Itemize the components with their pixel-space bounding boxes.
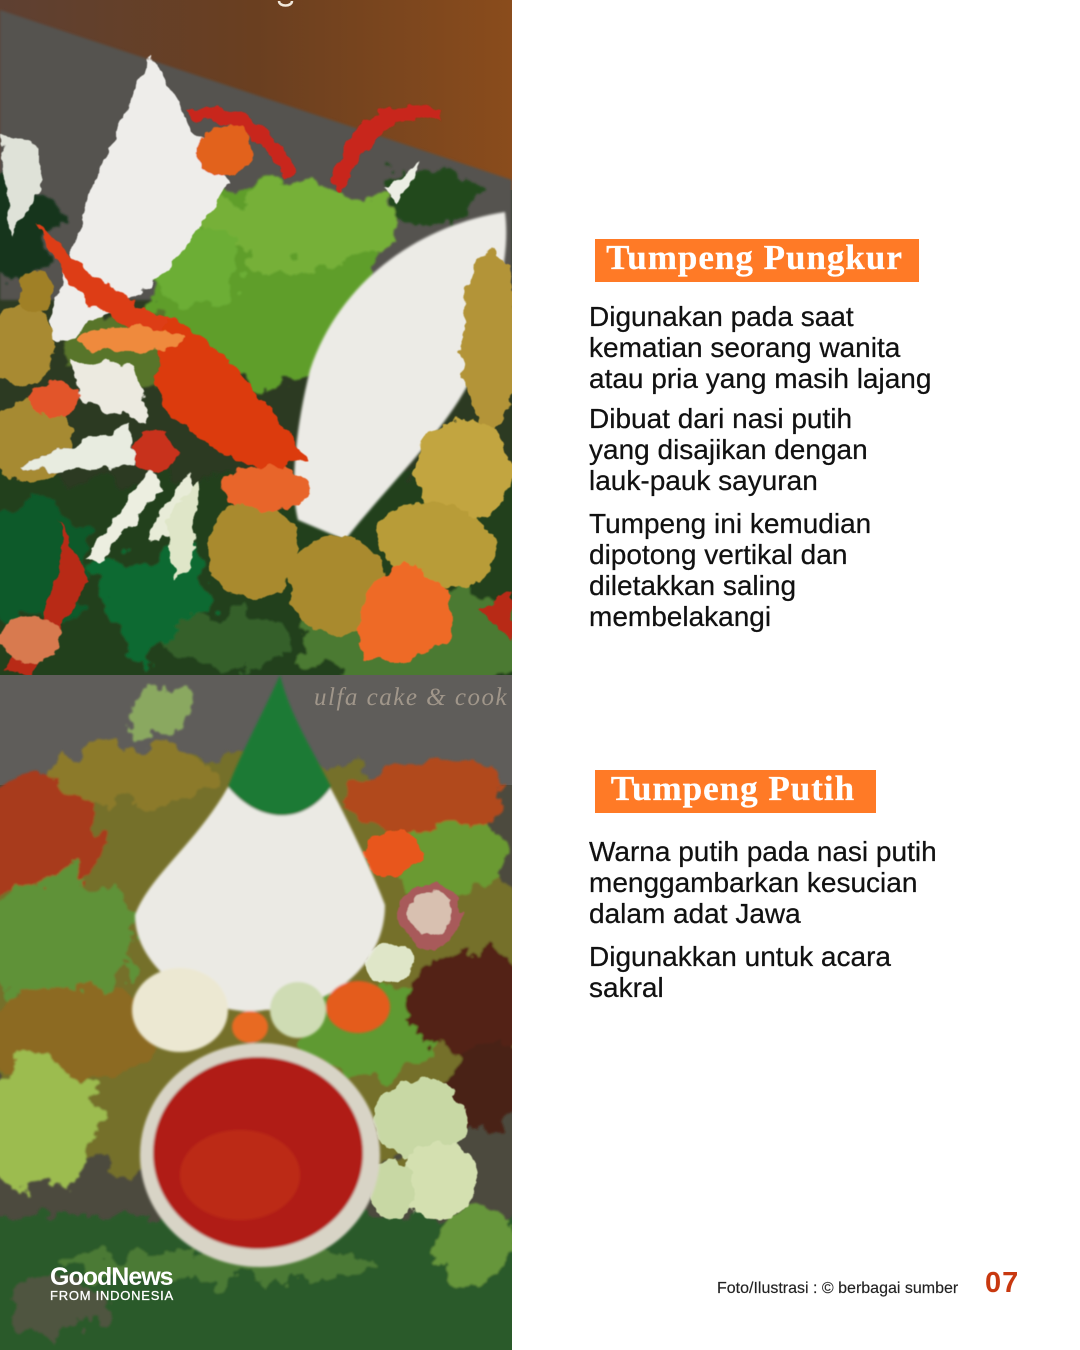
text: pungkur paragraph 1: Digunakan pada saat <box>589 301 854 332</box>
text: putih paragraph 2: Digunakkan untuk acara <box>589 941 891 972</box>
text: pungkur paragraph 2: yang disajikan dengan <box>589 434 868 465</box>
text: pungkur paragraph 1: kematian seorang wanita <box>589 332 900 363</box>
text: putih paragraph 1: dalam adat Jawa <box>589 898 801 929</box>
heading: Tumpeng Putih: Tumpeng Putih <box>611 769 855 808</box>
page number: 07 <box>985 1267 1019 1299</box>
text: pungkur paragraph 2: Dibuat dari nasi putih <box>589 403 852 434</box>
text: pungkur paragraph 3: membelakangi <box>589 601 771 632</box>
text: putih paragraph 2 <box>589 941 892 1003</box>
text: putih paragraph 1 <box>589 836 937 929</box>
text: pungkur paragraph 3 <box>589 508 871 632</box>
text: putih paragraph 1: menggambarkan kesucian <box>589 867 917 898</box>
logo: GoodNews from Indonesia: FROM INDONESIA <box>50 1288 174 1303</box>
watermark text: ulfa cake & cook <box>314 684 508 711</box>
photo credit: Foto/Ilustrasi : © berbagai sumber <box>717 1280 958 1297</box>
heading: Tumpeng Pungkur: Tumpeng Pungkur <box>606 238 903 277</box>
logo: GoodNews from Indonesia: GoodNews <box>50 1263 173 1291</box>
text: pungkur paragraph 3: dipotong vertikal dan <box>589 539 847 570</box>
photo: tumpeng pungkur <box>0 0 512 675</box>
text: pungkur paragraph 3: Tumpeng ini kemudian <box>589 508 871 539</box>
text: putih paragraph 1: Warna putih pada nasi putih <box>589 836 937 867</box>
logo: GoodNews from Indonesia <box>50 1263 174 1303</box>
text: pungkur paragraph 3: diletakkan saling <box>589 570 796 601</box>
text: pungkur paragraph 2 <box>588 403 868 496</box>
text: putih paragraph 2: sakral <box>589 972 664 1003</box>
photo: tumpeng putih <box>0 675 512 1350</box>
text: pungkur paragraph 1 <box>589 301 931 394</box>
text: pungkur paragraph 1: atau pria yang masih lajang <box>589 363 931 394</box>
text: pungkur paragraph 2: lauk-pauk sayuran <box>589 465 818 496</box>
